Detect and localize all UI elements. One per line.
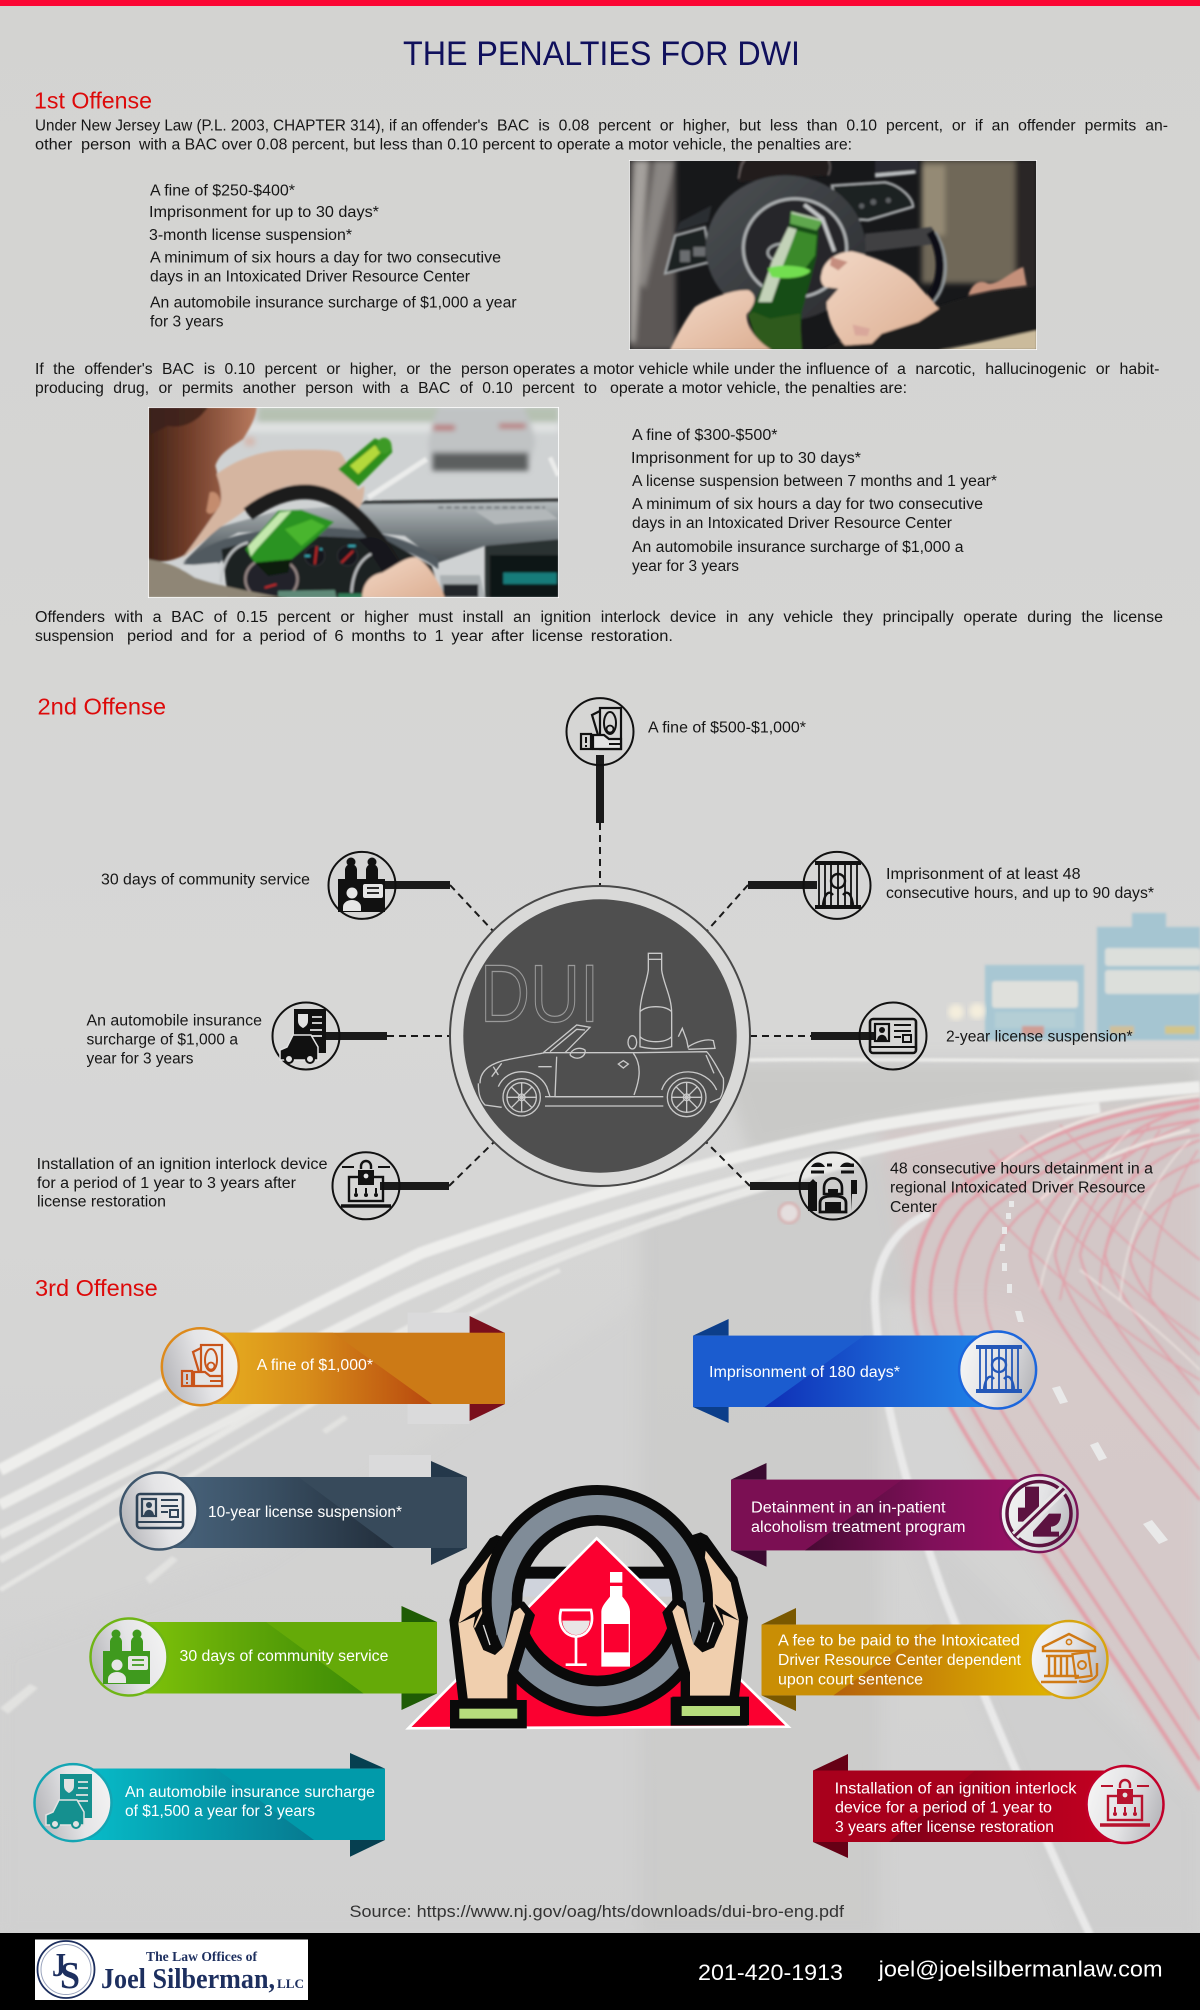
banner: insurance surcharge of $1,500 [34,1753,385,1857]
text block: first paragraph [35,118,1168,154]
list: penalties for BAC 0.10 or higher: year for 3 years [632,558,739,575]
banner: imprisonment of 180 days [693,1319,1036,1423]
item: imprisonment: Imprisonment of at least 48 [886,866,1081,883]
item: ignition interlock: Installation of an ignition interlock device [37,1156,327,1173]
text block: first paragraph: BAC is 0.08 percent or higher, but less than 0.10 percent, or if an offender permits an- [497,118,1168,134]
item: insurance surcharge: An automobile insurance [86,1012,262,1030]
icon: money [581,708,621,749]
bottle outline [640,953,672,1049]
banner: imprisonment of 180 days: Imprisonment of 180 days* [709,1364,900,1381]
item: ignition interlock: license restoration [37,1194,166,1210]
left hand fingers [458,1602,535,1700]
radial connectors [321,755,876,1186]
item: detainment [800,1152,1153,1220]
banner: ignition interlock [813,1754,1164,1858]
phone: 201-420-1913 [698,1960,843,1985]
banner: insurance surcharge of $1,500: of $1,500 a year for 3 years [125,1803,315,1820]
text block: first paragraph: other person [35,136,131,154]
icon: no alcohol [1014,1487,1064,1537]
text block: second paragraph: producing drug, or permits another person with a BAC of 0.10 percent to [35,380,597,397]
item: community service: 30 days of community service [101,872,310,889]
banner: 30 days of community service: 30 days of community service [180,1648,388,1665]
logo: law offices [35,1940,308,2000]
list: penalties for BAC 0.10 or higher: A license suspension between 7 months and 1 year* [632,473,997,490]
DUI lettering: DUI [480,949,599,1040]
icon: jail [815,863,861,907]
text block: second paragraph: operates a motor vehicle while under the influence of [513,361,889,378]
icon: wine glass [560,1610,592,1665]
item: insurance surcharge: surcharge of $1,000 a [86,1032,238,1049]
banner: fine of $1,000: A fine of $1,000* [257,1357,373,1374]
banner: insurance surcharge of $1,500: An automobile insurance surcharge [125,1784,375,1801]
text block: ignition interlock paragraph: Offenders with a BAC of 0.15 percent or higher must install an ignition interlock device in any vehicle they principally operate during the license [35,609,1163,626]
icon: bank [1041,1634,1097,1682]
list: penalties for BAC 0.08 to 0.10: An automobile insurance surcharge of $1,000 a year [150,295,517,312]
icon: id card [137,1494,183,1528]
icon: locked laptop [1100,1780,1150,1825]
list: penalties for BAC 0.08 to 0.10: A fine of $250-$400* [150,183,295,200]
steering wheel rim [502,1505,693,1696]
item: license suspension: 2-year license suspension* [946,1028,1133,1046]
banner: ignition interlock: 3 years after license restoration [835,1819,1054,1836]
item: community service [101,852,396,919]
wheel spoke [520,1567,677,1597]
item: ignition interlock: for a period of 1 year to 3 years after [37,1175,296,1192]
text block: ignition interlock paragraph [35,609,1163,645]
item: ignition interlock [37,1152,399,1219]
warning triangle [408,1538,788,1728]
list: penalties for BAC 0.10 or higher: An automobile insurance surcharge of $1,000 a [632,539,964,556]
text block: first paragraph: with a BAC over 0.08 percent, but less than 0.10 percent to operate a motor vehicle, the penalties are: [138,136,852,154]
icon: money [182,1345,222,1386]
banner: 30 days of community service [90,1606,437,1710]
item: imprisonment: consecutive hours, and up to 90 days* [886,885,1154,902]
source line: Source: https://www.nj.gov/oag/hts/downloads/dui-bro-eng.pdf [350,1902,844,1921]
list: penalties for BAC 0.08 to 0.10: A minimum of six hours a day for two consecutive [150,250,501,267]
heading: 1st Offense: 1st Offense [34,88,152,114]
banner: ignition interlock: Installation of an ignition interlock [835,1780,1077,1798]
text block: second paragraph [35,361,1159,397]
text block: ignition interlock paragraph: suspension [35,628,114,645]
list: penalties for BAC 0.10 or higher: A minimum of six hours a day for two consecutive [632,496,983,513]
central DUI emblem [450,886,750,1186]
text block: second paragraph: If the offender's BAC is 0.10 percent or higher, or the person [35,361,509,378]
banner: Intoxicated Driver Resource Center fee: A fee to be paid to the Intoxicated [778,1633,1020,1650]
logo: law offices: S [60,1955,80,1997]
banner: ignition interlock: device for a period of 1 year to [835,1800,1052,1817]
icon: officers and detainee [808,1162,857,1212]
item: license suspension [860,1002,1133,1070]
right hand fingers [662,1599,739,1697]
banner: 10-year license suspension [120,1455,467,1565]
item: detainment: Center [890,1199,937,1216]
item: detainment: 48 consecutive hours detainment in a [890,1161,1153,1178]
heading: 2nd Offense: 2nd Offense [38,694,166,720]
banner: Intoxicated Driver Resource Center fee: upon court sentence [778,1671,923,1688]
list: penalties for BAC 0.10 or higher [631,427,997,575]
text block: second paragraph: operate a motor vehicle, the penalties are: [610,380,907,397]
list: penalties for BAC 0.08 to 0.10: days in an Intoxicated Driver Resource Center [150,269,470,286]
text block: second paragraph: a narcotic, hallucinogenic or habit- [897,361,1159,378]
title: THE PENALTIES FOR DWI [403,35,800,73]
logo: law offices: The Law Offices of [146,1949,258,1964]
text block: ignition interlock paragraph: period and for a period of 6 months to 1 year after license restoration. [127,628,673,645]
banner: Intoxicated Driver Resource Center fee: Driver Resource Center dependent [778,1652,1022,1669]
hands base [449,1532,748,1728]
item: fine [566,698,806,765]
list: penalties for BAC 0.10 or higher: A fine of $300-$500* [632,427,778,444]
banner: in-patient treatment [731,1463,1078,1567]
footer [0,1933,1200,2010]
top accent bar [0,0,1200,6]
photo: driver holding a green bottle while steering [148,407,559,598]
text block: first paragraph: Under New Jersey Law (P.L. 2003, CHAPTER 314), if an offender's [35,118,488,134]
icon: id card [870,1019,916,1053]
list: penalties for BAC 0.08 to 0.10: Imprisonment for up to 30 days* [149,204,379,221]
photo: hands opening a beer bottle at the steering wheel [629,160,1037,350]
icon: insurance [280,1009,326,1063]
sign panels are part of the backdrop photo [985,965,1084,1040]
icon: people [103,1630,150,1684]
item: insurance surcharge [86,1002,340,1070]
banner: in-patient treatment: alcoholism treatment program [751,1519,966,1536]
icon: people [338,858,385,912]
icon: wine bottle [601,1572,630,1667]
banner: fine of $1,000 [162,1313,505,1424]
banner: in-patient treatment: Detainment in an in-patient [751,1500,946,1517]
banner: 10-year license suspension: 10-year license suspension* [208,1504,402,1521]
item: insurance surcharge: year for 3 years [86,1051,194,1068]
item: detainment: regional Intoxicated Driver Resource [890,1180,1146,1197]
email: joel@joelsilbermanlaw.com [878,1957,1163,1982]
list: penalties for BAC 0.10 or higher: Imprisonment for up to 30 days* [631,450,861,467]
list: penalties for BAC 0.10 or higher: days in an Intoxicated Driver Resource Center [632,515,952,532]
item: imprisonment [804,852,1154,919]
icon: insurance [46,1774,92,1828]
icon: jail [976,1347,1022,1391]
item: fine: A fine of $500-$1,000* [648,720,806,737]
logo: law offices: J [52,1947,66,1984]
illustration: hands on steering wheel with alcohol warning [408,1505,788,1728]
logo: law offices: LLC [277,1976,304,1991]
convertible car outline [478,1025,724,1117]
heading: 3rd Offense: 3rd Offense [35,1275,158,1301]
list: penalties for BAC 0.08 to 0.10 [149,183,517,331]
cuffs [450,1697,749,1728]
list: penalties for BAC 0.08 to 0.10: for 3 years [150,314,224,331]
list: penalties for BAC 0.08 to 0.10: 3-month license suspension* [149,227,352,244]
logo: law offices: Joel Silberman, [101,1963,275,1995]
banner: Intoxicated Driver Resource Center fee [762,1608,1108,1711]
icon: locked laptop [341,1161,391,1206]
